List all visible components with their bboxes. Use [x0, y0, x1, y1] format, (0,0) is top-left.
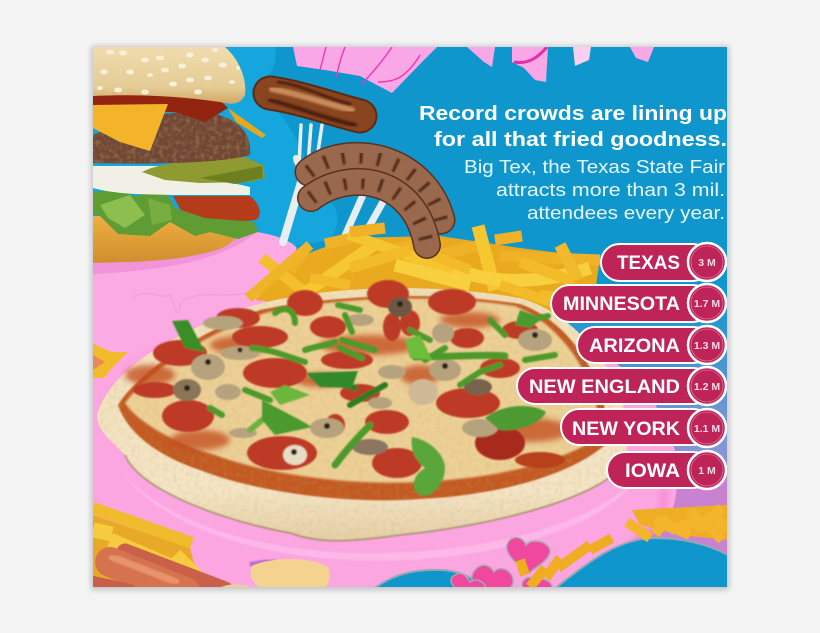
patty: [93, 112, 250, 164]
pill: New York: 1.1 M: [694, 423, 720, 435]
pill: New England: 1.2 M: [694, 381, 720, 393]
pepper leaves: [172, 310, 546, 496]
sausage on fork: [270, 82, 360, 125]
pill: Minnesota: [551, 284, 726, 322]
green peppers: [210, 305, 555, 465]
upper pink cake plate: [93, 232, 297, 362]
pill: Iowa: [607, 451, 726, 489]
pizza: [93, 280, 633, 550]
body text: attracts more than 3 mil.: [496, 179, 725, 200]
ketchup: [93, 95, 228, 122]
torn pink ribbon shapes: [293, 47, 654, 93]
burger: [93, 47, 266, 263]
lettuce: [93, 190, 258, 239]
bottom bun: [93, 216, 240, 263]
crust: [97, 288, 628, 541]
nugget: [221, 559, 330, 587]
sauce patches: [118, 296, 607, 500]
pill: New York: [561, 409, 726, 447]
fries: small left: [93, 344, 128, 378]
mushrooms: [173, 297, 552, 465]
toppings: [133, 280, 575, 496]
cheese: [125, 299, 599, 483]
mushroom gills: [184, 301, 538, 455]
pill: New York: NEW YORK: [572, 419, 680, 440]
pill: Arizona: [577, 326, 726, 364]
pill: Arizona: 1.3 M: [694, 340, 720, 352]
cheese: [93, 104, 168, 151]
pill: Iowa: IOWA: [625, 461, 680, 482]
lower pink plate: [93, 364, 677, 587]
cheese texture: [93, 280, 633, 550]
sesame seeds: [97, 48, 240, 94]
body text: Big Tex, the Texas State Fair: [464, 156, 725, 177]
fork: [283, 125, 384, 242]
background blue: [250, 47, 727, 492]
onion: [93, 166, 250, 195]
blue hills: [372, 538, 730, 590]
illustration: [93, 47, 730, 600]
pill: Iowa: 1 M: [698, 465, 716, 477]
pill: Minnesota: 1.7 M: [694, 298, 720, 310]
lighter blue arc: [93, 47, 337, 260]
pill: Texas: TEXAS: [617, 253, 680, 274]
heading text: for all that fried goodness.: [434, 129, 727, 151]
pill: Texas: 3 M: [698, 257, 716, 269]
pill: New England: NEW ENGLAND: [529, 377, 680, 398]
pill: Texas: [601, 243, 726, 281]
crust base edge: [125, 455, 625, 541]
body text: [464, 156, 725, 223]
pickle: [142, 157, 265, 183]
heading text: Record crowds are lining up: [419, 103, 727, 125]
pill: Arizona: ARIZONA: [589, 336, 680, 357]
pepperoni slices: [133, 280, 575, 478]
pill: Minnesota: MINNESOTA: [563, 294, 680, 315]
tomato: [173, 196, 260, 222]
sausage lower left: [93, 552, 225, 592]
grilled sausages: [309, 156, 441, 245]
icon: hearts: [450, 536, 553, 587]
top bun: [93, 47, 245, 104]
fries: left bottom: [93, 508, 200, 587]
fries: lower right: [520, 505, 727, 587]
body text: attendees every year.: [527, 202, 725, 223]
infographic canvas: [88, 43, 732, 593]
pill: New England: [517, 367, 726, 405]
heading text: [419, 103, 727, 151]
right plate shadow: [650, 474, 727, 553]
fries: main pile: [248, 226, 600, 320]
sauce blotches: [125, 312, 570, 450]
card shadow: [91, 46, 729, 590]
